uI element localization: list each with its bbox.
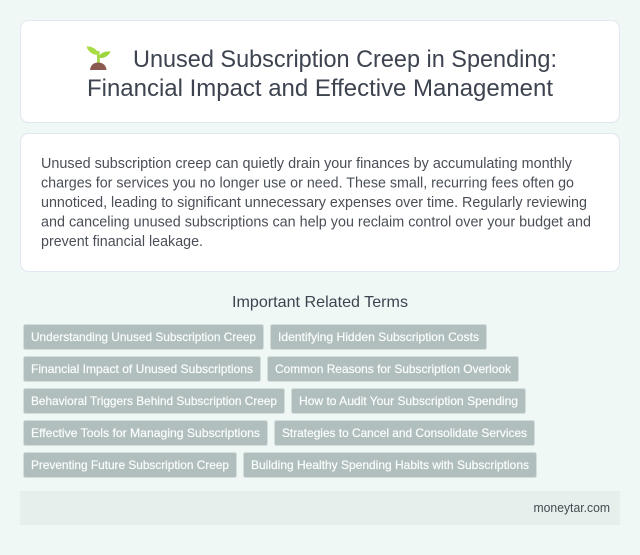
tag bbox=[292, 388, 526, 414]
tag: How to Audit Your Subscription Spending bbox=[299, 394, 518, 408]
text block: summary: and canceling unused subscriptions can help you reclaim control over your budget and bbox=[41, 214, 591, 230]
tag: Understanding Unused Subscription Creep bbox=[31, 330, 256, 344]
tag bbox=[24, 356, 260, 382]
tag list bbox=[24, 324, 536, 478]
footer bbox=[20, 491, 620, 525]
tag bbox=[24, 324, 264, 350]
tag: Effective Tools for Managing Subscriptions bbox=[31, 426, 260, 440]
panel: summary card bbox=[20, 134, 620, 272]
tag bbox=[244, 452, 536, 478]
panel: title card bbox=[20, 20, 620, 122]
text block: summary bbox=[41, 156, 591, 250]
title: Unused Subscription Creep in Spending: bbox=[133, 46, 557, 73]
text block: summary: charges for services you no longer use or need. These small, recurring fees often go bbox=[41, 176, 574, 192]
title bbox=[87, 46, 557, 102]
text block: summary: prevent financial leakage. bbox=[41, 234, 203, 250]
tag: Behavioral Triggers Behind Subscription Creep bbox=[31, 394, 277, 408]
tag: Identifying Hidden Subscription Costs bbox=[278, 330, 479, 344]
tag: Strategies to Cancel and Consolidate Services bbox=[282, 426, 527, 440]
tag: Preventing Future Subscription Creep bbox=[31, 458, 229, 472]
title: Financial Impact and Effective Management bbox=[87, 75, 553, 102]
tag bbox=[268, 356, 518, 382]
icon: seedling bbox=[86, 46, 110, 70]
tag bbox=[270, 324, 486, 350]
tag bbox=[274, 420, 534, 446]
tag: Financial Impact of Unused Subscriptions bbox=[31, 362, 253, 376]
tag bbox=[24, 420, 268, 446]
text block: summary: unnoticed, leading to significant unnecessary expenses over time. Regularly reviewing bbox=[41, 195, 587, 211]
tag: Common Reasons for Subscription Overlook bbox=[275, 362, 512, 376]
tag: Building Healthy Spending Habits with Subscriptions bbox=[251, 458, 529, 472]
heading: related terms: Important Related Terms bbox=[232, 294, 408, 311]
text block: summary: Unused subscription creep can quietly drain your finances by accumulating monthly bbox=[41, 156, 573, 172]
tag bbox=[24, 452, 236, 478]
tag bbox=[24, 388, 284, 414]
footer: moneytar.com bbox=[534, 501, 610, 515]
